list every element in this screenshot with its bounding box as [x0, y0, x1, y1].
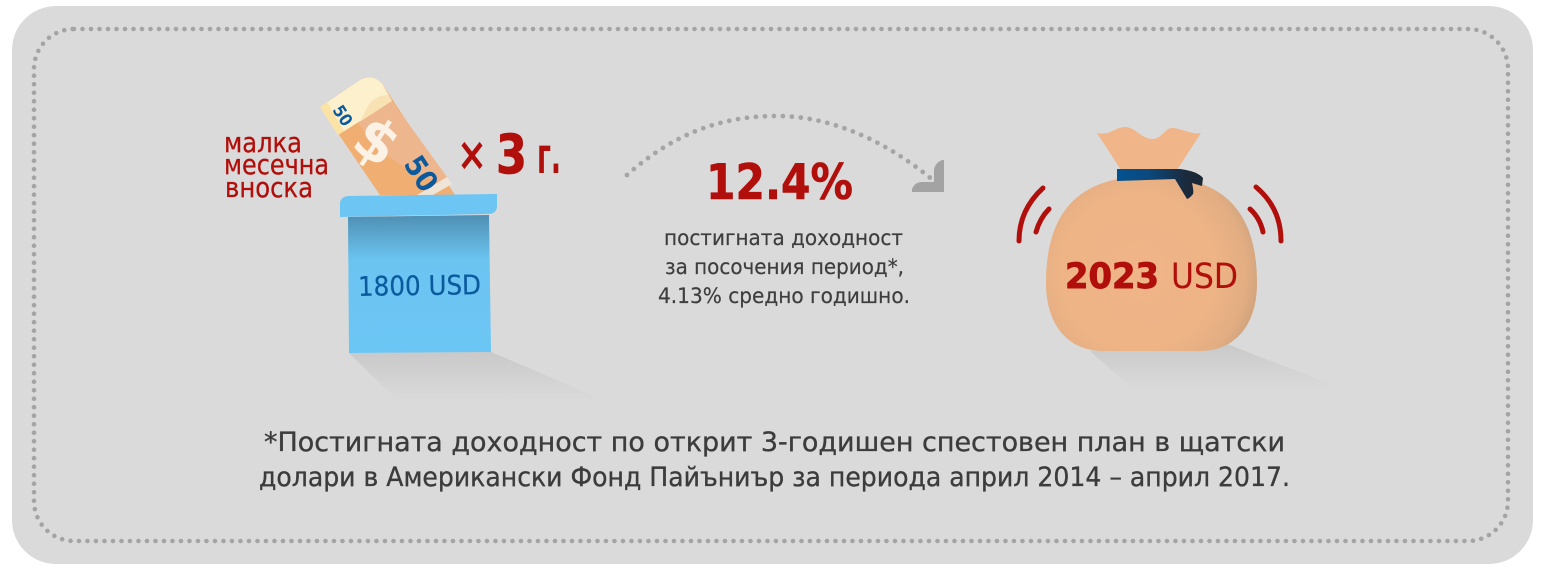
icon: banknote: 50: [328, 102, 356, 130]
times three years: [457, 123, 561, 186]
footnote: [259, 427, 1290, 493]
yield description: 4.13% средно годишно.: [658, 284, 910, 308]
icon: contribution box: [340, 194, 497, 353]
icon: banknote: [320, 77, 455, 198]
bag shadow: [1090, 344, 1343, 389]
yield description: за посочения период*,: [665, 255, 904, 279]
arrow: dotted arc: [627, 116, 944, 192]
bag amount: USD: [1171, 257, 1238, 297]
footnote: *Постигната доходност по открит 3-годишен спестовен план в щатски: [264, 427, 1285, 458]
bag amount: [1065, 257, 1238, 297]
icon: shake lines: [1019, 187, 1281, 241]
bag amount: 2023: [1065, 257, 1159, 297]
yield description: постигната доходност: [664, 226, 903, 250]
icon: banknote: $: [341, 102, 412, 181]
small monthly contribution label: вноска: [225, 171, 313, 204]
box shadow: [349, 352, 606, 401]
footnote: долари в Американски Фонд Пайъниър за периода април 2014 – април 2017.: [259, 462, 1290, 493]
icon: money bag: [1046, 127, 1257, 351]
yield figure: 12.4%: [706, 154, 853, 211]
times three years: ×: [457, 127, 487, 181]
small monthly contribution label: [224, 126, 329, 204]
icon: banknote: 50: [397, 149, 445, 198]
times three years: г.: [537, 127, 561, 185]
times three years: 3: [496, 123, 527, 186]
box amount: 1800 USD: [358, 270, 481, 303]
small monthly contribution label: малка: [224, 126, 302, 159]
yield description: [658, 226, 910, 308]
small monthly contribution label: месечна: [224, 148, 329, 181]
